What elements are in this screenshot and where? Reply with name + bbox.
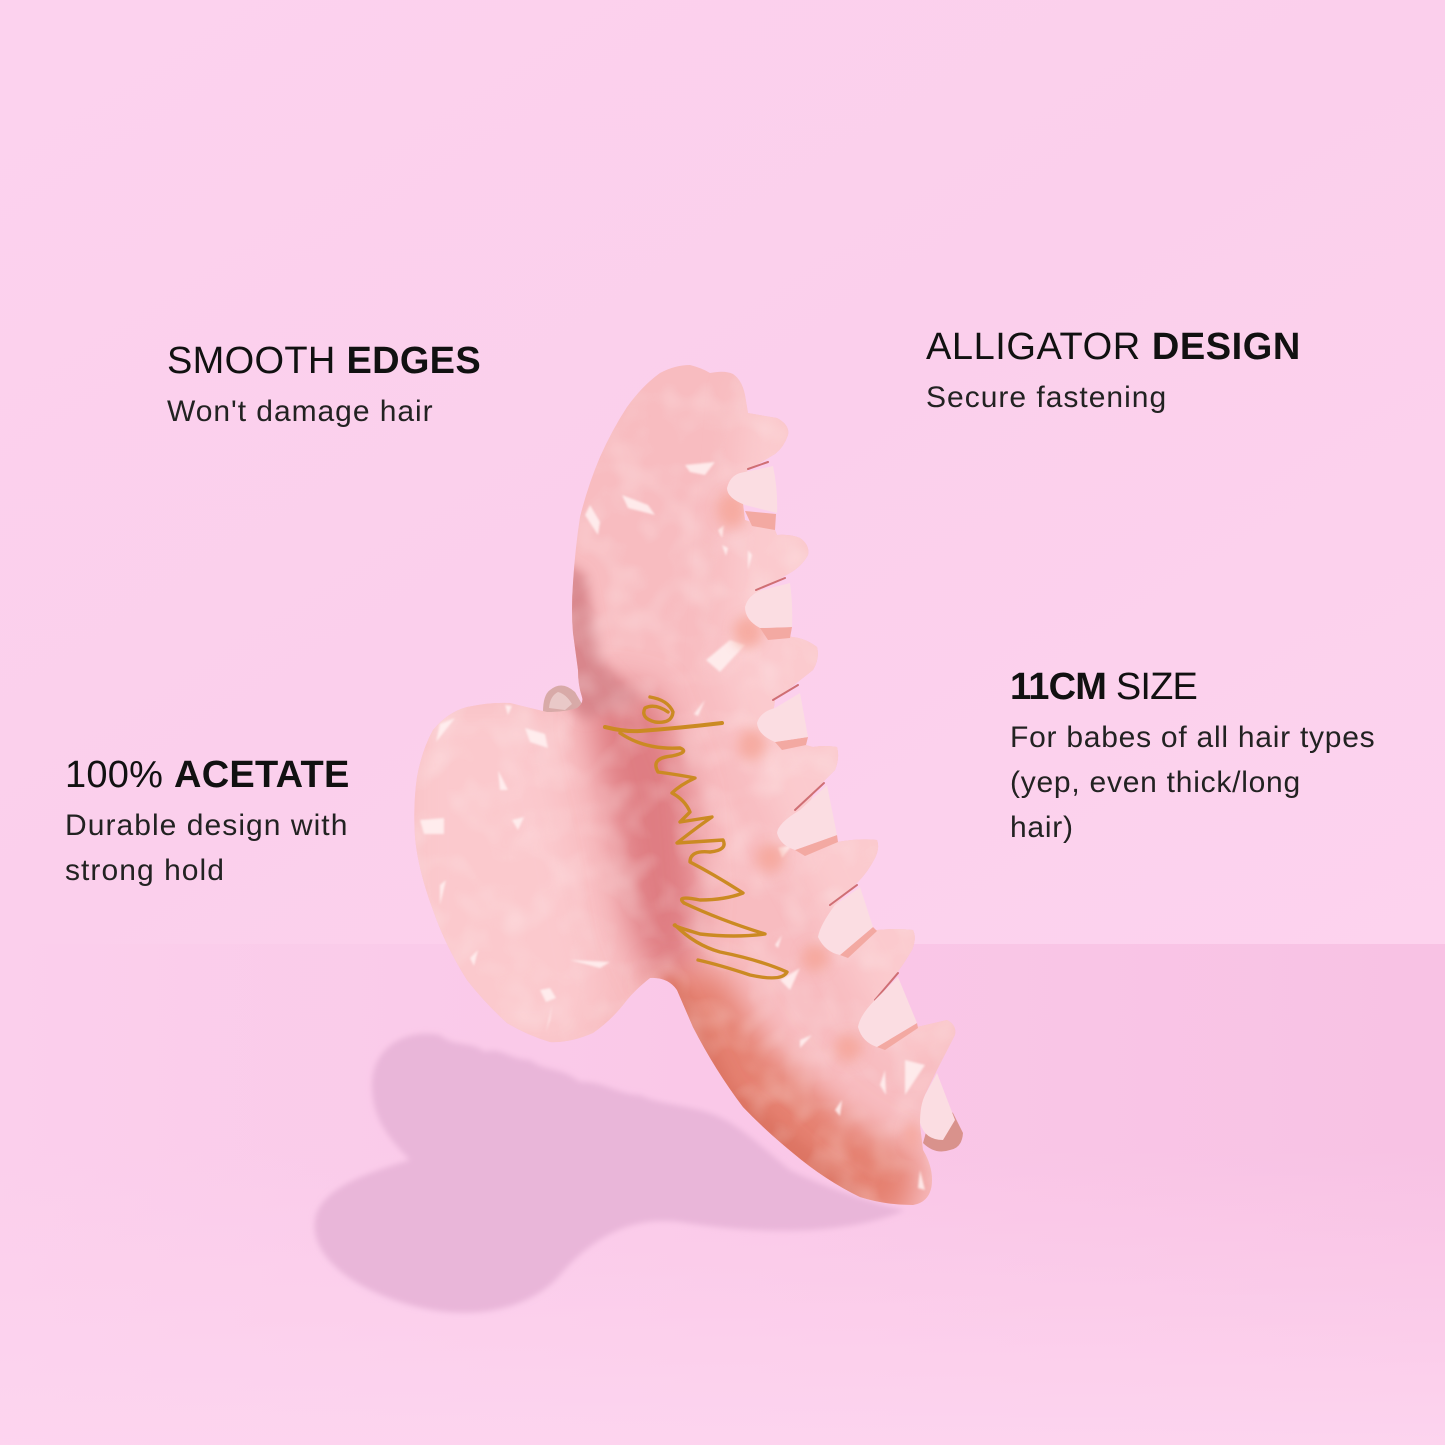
upper left edge shading: [568, 562, 630, 722]
back piece below last tooth: [923, 1100, 963, 1151]
callout: 100% acetate: 100% ACETATE: [65, 754, 350, 796]
hinge: [543, 685, 582, 712]
callout: 11cm size: 11CM SIZE: [1010, 666, 1197, 708]
callout: 11cm size: [1010, 666, 1375, 844]
callout: alligator design: Secure fastening: [926, 381, 1167, 414]
lighter handle and teeth zones: [416, 706, 592, 1042]
callout: 100% acetate: Durable design with: [65, 809, 348, 842]
callout: smooth edges: Won't damage hair: [167, 395, 434, 428]
callout: 100% acetate: [65, 754, 350, 887]
callout: 11cm size: For babes of all hair types: [1010, 721, 1375, 754]
tooth shadows: [717, 492, 919, 1149]
callout: 11cm size: (yep, even thick/long: [1010, 766, 1301, 799]
cast shadow: [315, 1034, 905, 1313]
rose band at the bend: [590, 680, 700, 990]
callout: smooth edges: [167, 340, 481, 428]
callout: 11cm size: hair): [1010, 811, 1074, 844]
callout: alligator design: ALLIGATOR DESIGN: [926, 326, 1301, 368]
callout: smooth edges: SMOOTH EDGES: [167, 340, 481, 382]
lower edge shading: [655, 970, 920, 1225]
product scene: background, shadow and claw clip: [312, 365, 1445, 1315]
gold logo script: [605, 697, 787, 978]
callout: alligator design: [926, 326, 1301, 414]
pearlescent flecks: [420, 462, 925, 1190]
callout: 100% acetate: strong hold: [65, 854, 225, 887]
claw clip: [400, 350, 980, 1225]
tooth gap slivers: [748, 462, 898, 1000]
clip body with upper teeth: [414, 365, 956, 1205]
front teeth: [727, 466, 955, 1140]
pearl texture: [415, 392, 924, 1202]
